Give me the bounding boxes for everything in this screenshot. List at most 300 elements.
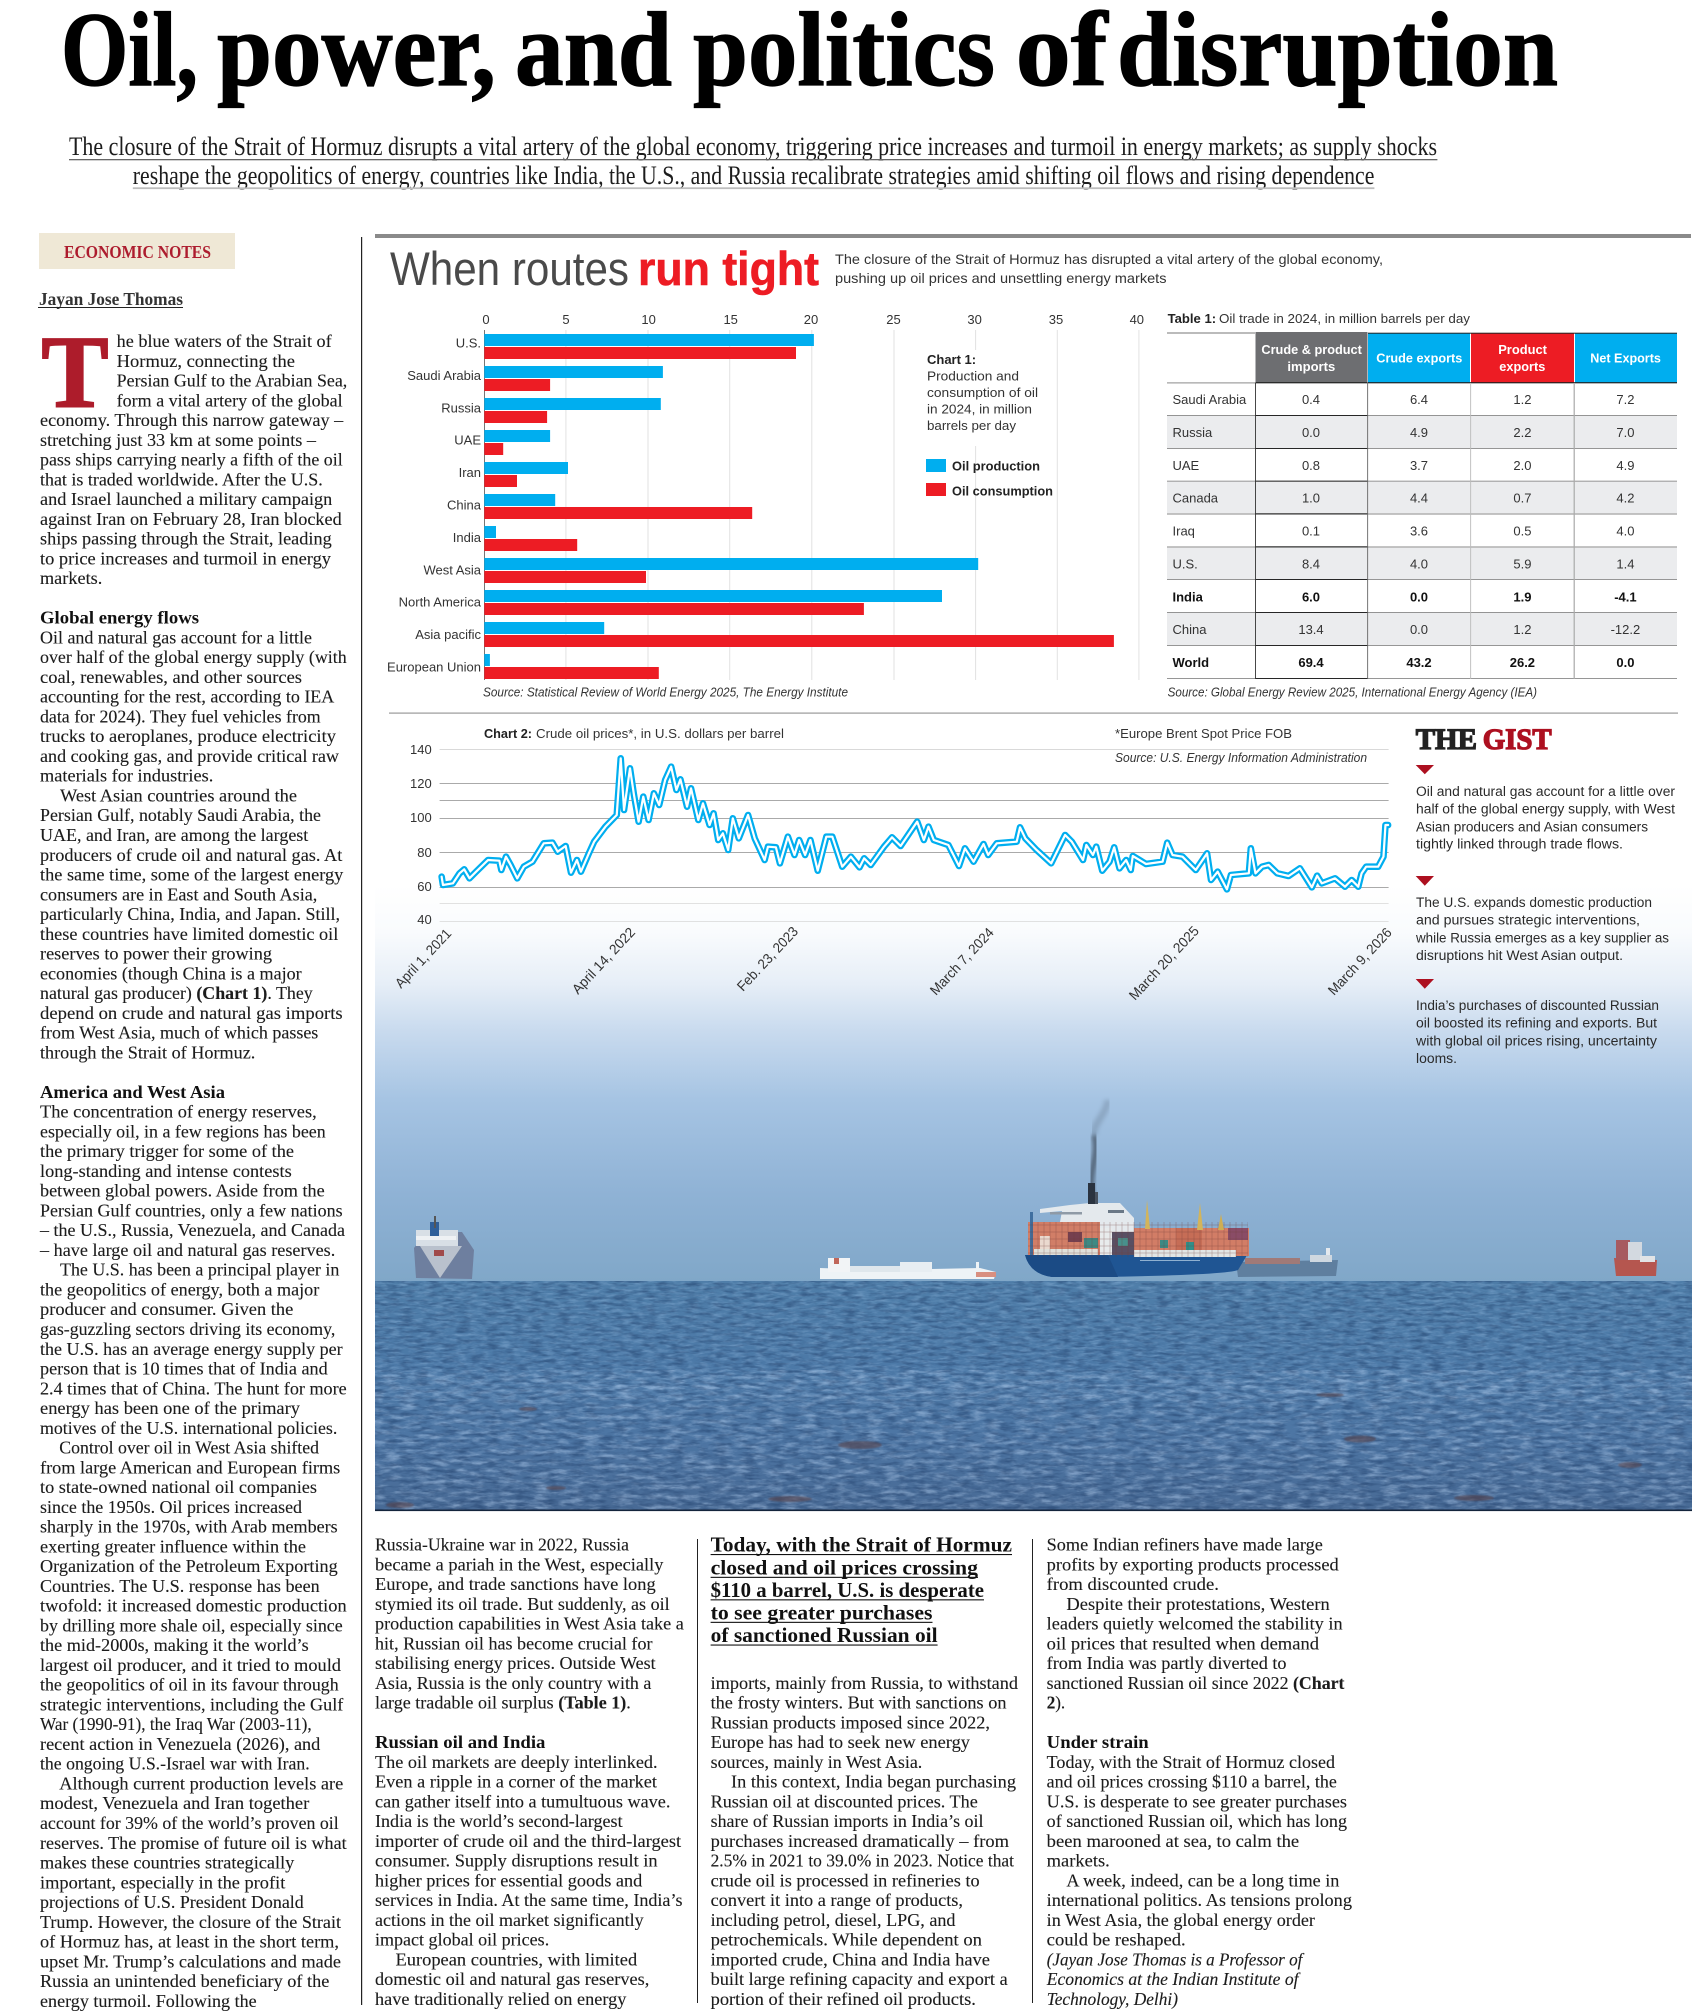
left column rule [361, 237, 362, 2005]
subtitle [69, 132, 1437, 190]
table header: imports [1287, 359, 1335, 374]
article body: lower column 1: Europe, and trade sanctions have long [375, 1574, 656, 1594]
pull quote: of sanctioned Russian oil [711, 1623, 938, 1647]
author note: Economics at the Indian Institute of [1046, 1969, 1301, 1989]
ship: white vessel [820, 1258, 996, 1279]
article body: lower column 1: importer of crude oil and the third-largest [375, 1831, 681, 1851]
chart 1 x-axis ticks: 40 [1130, 312, 1144, 327]
gist point 3: oil boosted its refining and exports. But [1416, 1016, 1657, 1031]
article body: lower column 2: 2.5% in 2021 to 39.0% in 2023. Notice that [711, 1851, 1014, 1871]
sea surface flecks [386, 1393, 1642, 1508]
article body: left column: Organization of the Petroleum Exporting [40, 1556, 338, 1576]
article body: left column: producers of crude oil and natural gas. At [40, 845, 342, 865]
article body: left column: upset Mr. Trump’s calculations and made [40, 1951, 341, 1971]
article body: left column: that is traded worldwide. After the U.S. [40, 469, 323, 489]
article body: lower column 1: domestic oil and natural gas reserves, [375, 1969, 649, 1989]
ship: distant cargo vessel [1236, 1248, 1338, 1277]
country labels: Russia [441, 400, 482, 415]
article body: left column: Control over oil in West Asia shifted [59, 1438, 319, 1458]
table rows: 4.0 [1410, 556, 1428, 572]
graphic description: pushing up oil prices and unsettling energy markets [835, 270, 1166, 286]
table rows: Iraq [1172, 524, 1195, 539]
table rows: 0.8 [1302, 458, 1320, 473]
country labels: U.S. [456, 336, 481, 350]
graphic description: The closure of the Strait of Hormuz has disrupted a vital artery of the global economy, [835, 251, 1383, 267]
smoke plume [1091, 1100, 1108, 1195]
table header: exports [1499, 359, 1545, 374]
article body: lower column 2: convert it into a range of products, [711, 1890, 963, 1910]
article body: left column: important, especially in the profit [40, 1872, 285, 1892]
table header: Product [1498, 342, 1548, 357]
chart 1 x-axis ticks: 5 [562, 312, 570, 327]
article body: left column: the same time, some of the largest energy [40, 864, 343, 884]
article body: left column: reserves to power their growing [40, 944, 272, 964]
article body: left column [39, 331, 347, 2011]
article body: lower column 1: The oil markets are deeply interlinked. [375, 1752, 658, 1772]
article body: left column: West Asian countries around the [60, 786, 297, 806]
country labels: European Union [387, 660, 481, 674]
chart 1 x-axis ticks [482, 312, 1144, 327]
table rows: U.S. [1172, 556, 1198, 572]
article body: lower column 1: production capabilities in West Asia take a [375, 1614, 684, 1634]
table rows: 1.0 [1302, 491, 1320, 506]
table rows: -12.2 [1611, 622, 1640, 637]
article body: left column: person that is 10 times that of India and [40, 1358, 328, 1378]
article body: left column: reserves. The promise of future oil is what [40, 1833, 347, 1853]
chart 2 y-axis labels: 80 [417, 845, 432, 860]
graphic heading: when routes run tight: run tight [638, 242, 819, 295]
table rows: 2.2 [1513, 425, 1531, 440]
country labels: Saudi Arabia [407, 368, 482, 383]
article body: lower column 1: services in India. At the same time, India’s [375, 1890, 683, 1910]
table rows: 0.4 [1302, 392, 1320, 407]
chart 2 note and source: *Europe Brent Spot Price FOB [1115, 726, 1292, 741]
article body: left column: energy has been one of the primary [40, 1398, 300, 1418]
graphic top rule [375, 234, 1691, 238]
article body: left column: stretching just 33 km at some points – [40, 430, 316, 450]
article body: left column: Persian Gulf to the Arabian Sea, [117, 370, 347, 390]
article body: left column: he blue waters of the Strait of [117, 331, 332, 351]
article body: lower column 2: imports, mainly from Russia, to withstand [711, 1673, 1018, 1693]
article body: left column: Hormuz, connecting the [117, 351, 295, 371]
table rows: India [1172, 589, 1204, 604]
article body: lower column 1: have traditionally relied on energy [375, 1989, 627, 2009]
chart 2 y-axis labels: 120 [410, 776, 432, 791]
article body: left column: between global powers. Aside from the [40, 1181, 325, 1201]
table rows: 7.2 [1616, 392, 1634, 407]
article body: lower column 2: Russian oil at discounted prices. The [711, 1791, 978, 1811]
chart 1 source: Source: Statistical Review of World Energy 2025, The Energy Institute [483, 686, 848, 700]
country labels: UAE [454, 433, 481, 448]
table rows: 69.4 [1298, 655, 1324, 670]
article body: lower column 1: consumer. Supply disruptions result in [375, 1851, 658, 1871]
gist point 3: looms. [1416, 1051, 1457, 1066]
pull quote: Today, with the Strait of Hormuz [711, 1533, 1012, 1557]
table rows: 43.2 [1406, 655, 1432, 670]
table rows: 6.0 [1302, 589, 1320, 604]
chart 2 y-axis labels: 100 [410, 810, 432, 825]
table rows: 1.2 [1513, 622, 1531, 637]
article body: left column: producer and consumer. Given the [40, 1299, 293, 1319]
article body: left column: data for 2024). They fuel vehicles from [40, 706, 321, 726]
table rows: 8.4 [1302, 556, 1320, 572]
article body: left column: these countries have limited domestic oil [40, 924, 338, 944]
article body: lower column 3: A week, indeed, can be a long time in [1066, 1870, 1340, 1890]
chart 2 date labels: Feb. 23, 2023 [733, 923, 801, 994]
table rows: 4.0 [1616, 524, 1634, 539]
ship: right red vessel [1614, 1240, 1657, 1276]
article body: left column: sharply in the 1970s, with Arab members [40, 1517, 338, 1537]
gist point 1: Oil and natural gas account for a little over [1416, 784, 1676, 799]
chart 2 date labels: April 1, 2021 [391, 925, 454, 991]
article body: lower column 1: became a pariah in the West, especially [375, 1554, 664, 1574]
pull quote [711, 1533, 1012, 1647]
article body: left column: and cooking gas, and provide critical raw [40, 746, 339, 766]
article body: lower column 3: sanctioned Russian oil since 2022 (Chart [1047, 1673, 1345, 1693]
chart 2 note and source [1115, 726, 1367, 765]
article body: left column: to price increases and turmoil in energy [40, 548, 331, 568]
article body: left column: motives of the U.S. international policies. [40, 1418, 337, 1438]
article body: left column: The U.S. has been a principal player in [60, 1260, 340, 1280]
chart 2 y-axis labels: 40 [417, 912, 432, 927]
table rows: 3.7 [1410, 458, 1428, 473]
table rows: 0.0 [1410, 589, 1428, 604]
chart 2 date labels: March 7, 2024 [926, 924, 997, 998]
article body: left column: consumers are in East and South Asia, [40, 884, 317, 904]
table row shading [1167, 415, 1677, 645]
article body: left column: natural gas producer) (Chart 1). They [40, 983, 313, 1003]
article body: left column: depend on crude and natural gas imports [40, 1003, 343, 1023]
gist point 1: Asian producers and Asian consumers [1416, 819, 1648, 834]
article body: lower column 1: higher prices for essential goods and [375, 1870, 643, 1890]
chart 1 x-axis ticks: 25 [886, 312, 901, 327]
chart 2 date labels: March 9, 2026 [1324, 924, 1395, 998]
article body: left column: particularly China, India, and Japan. Still, [40, 904, 340, 924]
article body: lower column 3: markets. [1047, 1851, 1110, 1871]
article body: lower column 2: petrochemicals. While dependent on [711, 1930, 982, 1950]
table rows: 26.2 [1510, 655, 1535, 670]
article body: left column: Trump. However, the closure of the Strait [40, 1912, 341, 1932]
article body: left column: projections of U.S. President Donald [40, 1892, 304, 1912]
chart 2 y-axis labels: 140 [410, 742, 432, 757]
article body: lower column 3: from discounted crude. [1047, 1574, 1219, 1594]
gist point 2 [1415, 876, 1669, 963]
article body: lower column 3: Some Indian refiners have made large [1047, 1534, 1323, 1554]
chart 1 legend: Oil production [952, 459, 1040, 474]
article body: lower column 3 [1046, 1534, 1352, 2009]
drop cap T: T [42, 316, 108, 430]
subtitle: The closure of the Strait of Hormuz disrupts a vital artery of the global economy, triggering price increases and turmoil in energy markets; as supply shocks [69, 132, 1437, 161]
photo: ships at sea in the Strait of Hormuz [375, 885, 1692, 1511]
article body: left column: The concentration of energy reserves, [40, 1102, 317, 1122]
article body: lower column 2: including petrol, diesel, LPG, and [711, 1910, 956, 1930]
table rows: 1.2 [1513, 392, 1531, 407]
table rows: 13.4 [1298, 622, 1324, 637]
article body: lower column 1: Even a ripple in a corner of the market [375, 1772, 657, 1792]
table rows: UAE [1172, 458, 1200, 473]
article body: left column: materials for industries. [40, 766, 213, 786]
table rows: 2.0 [1513, 458, 1531, 473]
table rows: -4.1 [1614, 589, 1637, 604]
article body: left column: UAE, and Iran, are among the largest [40, 825, 308, 845]
chart 2 y-axis labels [410, 742, 432, 927]
section heading: russian oil and india: Russian oil and India [375, 1732, 546, 1752]
article body: left column: 2.4 times that of China. The hunt for more [40, 1378, 347, 1398]
article body: lower column 1: stabilising energy prices. Outside West [375, 1653, 656, 1673]
article body: lower column 1: Asia, Russia is the only country with a [375, 1673, 651, 1693]
the gist panel [1415, 723, 1676, 1066]
chart 1 caption [927, 352, 1038, 433]
article body: lower column 2: Russian products imposed since 2022, [711, 1712, 990, 1732]
gist point 2: The U.S. expands domestic production [1416, 895, 1652, 910]
article body: left column: Although current production levels are [59, 1774, 343, 1794]
article body: lower column 1 [375, 1534, 684, 2009]
gist point 1 [1416, 765, 1676, 852]
article body: lower column 2: built large refining capacity and export a [711, 1969, 1008, 1989]
table source: Source: Global Energy Review 2025, International Energy Agency (IEA) [1168, 686, 1537, 700]
article body: lower column 2: crude oil is processed in refineries to [711, 1870, 980, 1890]
section heading: global energy flows: Global energy flows [40, 608, 199, 628]
article body: left column: markets. [40, 568, 102, 588]
article body: lower column 3: profits by exporting products processed [1047, 1554, 1339, 1574]
chart 1 x-axis ticks: 20 [804, 312, 818, 327]
chart 1 caption: consumption of oil [927, 385, 1038, 400]
article body: left column: energy turmoil. Following the [40, 1991, 257, 2011]
article body: lower column 1: India is the world’s second-largest [375, 1811, 623, 1831]
chart 2 date labels: April 14, 2022 [568, 924, 638, 997]
byline: Jayan Jose Thomas [39, 289, 183, 309]
article body: lower column 1: European countries, with limited [396, 1950, 637, 1970]
article body: lower column 3: Despite their protestations, Western [1066, 1594, 1330, 1614]
table rows: 0.1 [1302, 524, 1320, 539]
article body: left column: coal, renewables, and other sources [40, 667, 302, 687]
article body: lower column 3: of sanctioned Russian oil, which has long [1047, 1811, 1347, 1831]
article body: lower column 3: Today, with the Strait of Hormuz closed [1047, 1752, 1335, 1772]
article body: lower column 3: from India was partly diverted to [1047, 1653, 1287, 1673]
article body: left column: exerting greater influence within the [40, 1536, 306, 1556]
gist point 2: and pursues strategic interventions, [1416, 913, 1640, 928]
article body: lower column 1: impact global oil prices. [375, 1930, 549, 1950]
article body: left column: economies (though China is a major [40, 963, 302, 983]
chart 1 x-axis ticks: 10 [641, 312, 656, 327]
article body: lower column 2 [711, 1673, 1018, 2009]
article body: left column: the geopolitics of energy, both a major [40, 1280, 319, 1300]
country labels: West Asia [423, 562, 482, 577]
article body: left column: by drilling more shale oil, especially since [40, 1615, 343, 1635]
table rows: Russia [1172, 425, 1213, 440]
chart 1 x-axis ticks: 35 [1049, 312, 1063, 327]
article body: left column: War (1990-91), the Iraq War (2003-11), [40, 1714, 312, 1734]
article body: left column: trucks to aeroplanes, produce electricity [40, 726, 336, 746]
chart 1: horizontal bar chart of oil production and consumption [387, 312, 1144, 700]
article body: left column: twofold: it increased domestic production [40, 1596, 347, 1616]
article body: left column: strategic interventions, including the Gulf [40, 1694, 343, 1714]
chart 1 x-axis ticks: 0 [482, 312, 490, 327]
article body: left column: – the U.S., Russia, Venezuela, and Canada [39, 1220, 345, 1240]
article body: left column: form a vital artery of the global [117, 390, 343, 410]
gist point 3 [1415, 979, 1659, 1066]
article body: left column: especially oil, in a few regions has been [40, 1121, 326, 1141]
table header [1256, 332, 1677, 383]
article body: left column: the ongoing U.S.-Israel war with Iran. [40, 1754, 310, 1774]
gist heading [1416, 723, 1552, 756]
table header: Crude & product [1261, 342, 1363, 357]
ship: main container vessel [1025, 1183, 1249, 1277]
graphic heading: when routes run tight [390, 242, 819, 295]
table rows: Canada [1172, 491, 1219, 506]
article body: left column: Persian Gulf countries, only a few nations [40, 1200, 343, 1220]
chart 1 x-axis ticks: 15 [723, 312, 738, 327]
pull quote: $110 a barrel, U.S. is desperate [711, 1578, 984, 1602]
table 1: oil trade in 2024 [1167, 311, 1677, 700]
author note: (Jayan Jose Thomas is a Professor of [1047, 1950, 1304, 1970]
table rows: China [1172, 622, 1207, 637]
gist heading: GIST [1483, 723, 1552, 756]
table rows: Saudi Arabia [1172, 392, 1247, 407]
article body: lower column 1: Russia-Ukraine war in 2022, Russia [375, 1534, 629, 1554]
article body: left column: ships passing through the Strait, leading [40, 529, 332, 549]
article body: left column: largest oil producer, and it tried to mould [40, 1655, 341, 1675]
table rows: 1.9 [1513, 589, 1531, 604]
column rules [697, 1539, 1033, 2003]
chart 2 y-axis labels: 60 [417, 879, 432, 894]
article body: lower column 2: portion of their refined oil products. [711, 1989, 976, 2009]
article body: left column: from West Asia, much of which passes [40, 1023, 318, 1043]
article body: lower column 2: purchases increased dramatically – from [711, 1831, 1009, 1851]
article body: left column: economy. Through this narrow gateway – [40, 410, 344, 430]
author note: Technology, Delhi) [1047, 1989, 1178, 2009]
article body: left column: through the Strait of Hormuz. [40, 1042, 255, 1062]
country labels: India [453, 530, 482, 545]
article body: lower column 2: sources, mainly in West Asia. [711, 1752, 922, 1772]
article body: left column: modest, Venezuela and Iran together [40, 1793, 309, 1813]
table rows: 0.0 [1616, 655, 1634, 670]
article body: lower column 1: hit, Russian oil has become crucial for [375, 1633, 653, 1653]
article body: lower column 1: large tradable oil surplus (Table 1). [375, 1693, 631, 1713]
table title: Oil trade in 2024, in million barrels per day [1219, 311, 1471, 326]
table rows: World [1172, 655, 1209, 670]
table rows: 4.4 [1410, 491, 1428, 506]
chart 1 caption: barrels per day [927, 418, 1017, 433]
article body: lower column 3: 2). [1047, 1693, 1065, 1713]
article body: left column: against Iran on February 28, Iran blocked [40, 509, 342, 529]
chart 2 date labels [391, 923, 1395, 1003]
article body: lower column 1: actions in the oil market significantly [375, 1910, 644, 1930]
pull quote: closed and oil prices crossing [711, 1555, 979, 1579]
article body: left column: makes these countries strategically [40, 1852, 295, 1872]
table rows [1172, 392, 1640, 670]
column label: economic notes [39, 233, 235, 269]
gist point 2: disruptions hit West Asian output. [1416, 948, 1623, 963]
chart 1 caption: Production and [927, 369, 1019, 384]
article body: left column: Countries. The U.S. response has been [40, 1576, 320, 1596]
article body: left column: accounting for the rest, according to IEA [40, 687, 335, 707]
chart 1 legend: Oil consumption [952, 484, 1053, 499]
table title: Table 1: [1168, 311, 1216, 326]
subtitle: reshape the geopolitics of energy, countries like India, the U.S., and Russia recalibrate strategies amid shifting oil flows and rising dependence [133, 161, 1374, 190]
article body: lower column 2: share of Russian imports in India’s oil [711, 1811, 984, 1831]
country labels: Iran [459, 465, 481, 480]
article body: left column: of Hormuz has, at least in the short term, [40, 1932, 339, 1952]
country labels: Asia pacific [415, 627, 481, 642]
table rows: 0.7 [1513, 491, 1531, 506]
article body: lower column 3: been marooned at sea, to calm the [1047, 1831, 1299, 1851]
article body: lower column 3: could be reshaped. [1047, 1930, 1186, 1950]
article body: left column: the mid-2000s, making it the world’s [40, 1635, 309, 1655]
article body: left column: gas-guzzling sectors driving its economy, [40, 1319, 335, 1339]
table rows: 7.0 [1616, 425, 1634, 440]
pull quote: to see greater purchases [711, 1600, 932, 1624]
article body: left column: from large American and European firms [40, 1457, 340, 1477]
table rows: 4.9 [1410, 425, 1428, 440]
article body: left column: the U.S. has an average energy supply per [40, 1339, 343, 1359]
chart 2: crude oil price line chart [391, 726, 1395, 1003]
table rows: 5.9 [1513, 556, 1531, 572]
article body: left column: account for 39% of the world’s proven oil [40, 1813, 339, 1833]
title [61, 0, 1558, 108]
country labels: North America [399, 595, 482, 610]
table rows: 6.4 [1410, 392, 1428, 407]
article body: left column: Persian Gulf, notably Saudi Arabia, the [40, 805, 321, 825]
chart 1 legend [926, 459, 1053, 499]
chart 1 caption: in 2024, in million [927, 402, 1032, 417]
table rows: 0.5 [1513, 524, 1531, 539]
column label: economic notes: ECONOMIC NOTES [64, 242, 211, 262]
article body: left column: long-standing and intense contests [40, 1161, 292, 1181]
section divider [389, 712, 1678, 714]
article body: lower column 1: stymied its oil trade. But suddenly, as oil [375, 1594, 670, 1614]
table rows: 3.6 [1410, 524, 1428, 539]
article body: lower column 2: In this context, India began purchasing [731, 1772, 1016, 1792]
gist point 3: with global oil prices rising, uncertainty [1415, 1033, 1657, 1048]
article body: left column: the primary trigger for some of the [40, 1141, 294, 1161]
chart 2 date labels: March 20, 2025 [1125, 923, 1202, 1003]
gist heading: THE [1416, 723, 1477, 756]
table rows: 0.0 [1410, 622, 1428, 637]
chart 1 x-axis ticks: 30 [967, 312, 982, 327]
table rows: 4.9 [1616, 458, 1634, 473]
chart 2 note and source: Source: U.S. Energy Information Administration [1115, 751, 1367, 765]
article body: lower column 2: Europe has had to seek new energy [711, 1732, 970, 1752]
article body: lower column 3: and oil prices crossing $110 a barrel, the [1047, 1772, 1337, 1792]
article body: left column: and Israel launched a military campaign [40, 489, 333, 509]
section heading: under strain: Under strain [1047, 1732, 1149, 1752]
gist point 1: tightly linked through trade flows. [1416, 837, 1623, 852]
chart 2 title: Crude oil prices*, in U.S. dollars per barrel [536, 726, 784, 741]
table header: Crude exports [1376, 351, 1462, 366]
gist point 2: while Russia emerges as a key supplier as [1415, 930, 1669, 945]
article body: lower column 3: international politics. As tensions prolong [1047, 1890, 1352, 1910]
graphic heading: when routes run tight: When routes [390, 242, 629, 295]
article body: lower column 3: U.S. is desperate to see greater purchases [1047, 1791, 1347, 1811]
chart 1 caption: Chart 1: [927, 352, 976, 367]
article body: lower column 2: imported crude, China and India have [711, 1950, 990, 1970]
table rows: 0.0 [1302, 425, 1320, 440]
chart 2 title: Chart 2: [484, 726, 532, 741]
article body: left column: recent action in Venezuela (2026), and [40, 1734, 321, 1754]
article body: left column: Oil and natural gas account for a little [40, 627, 312, 647]
article body: left column: pass ships carrying nearly a fifth of the oil [40, 450, 343, 470]
article body: lower column 3: leaders quietly welcomed the stability in [1047, 1614, 1343, 1634]
graphic description [835, 251, 1383, 286]
consumption bars [484, 347, 1114, 679]
article body: left column: – have large oil and natural gas reserves. [39, 1240, 335, 1260]
country labels: China [447, 498, 482, 512]
article body: left column: over half of the global energy supply (with [40, 647, 347, 667]
ship: left tanker [414, 1216, 474, 1279]
table header: Net Exports [1590, 351, 1661, 366]
country labels [387, 336, 482, 674]
